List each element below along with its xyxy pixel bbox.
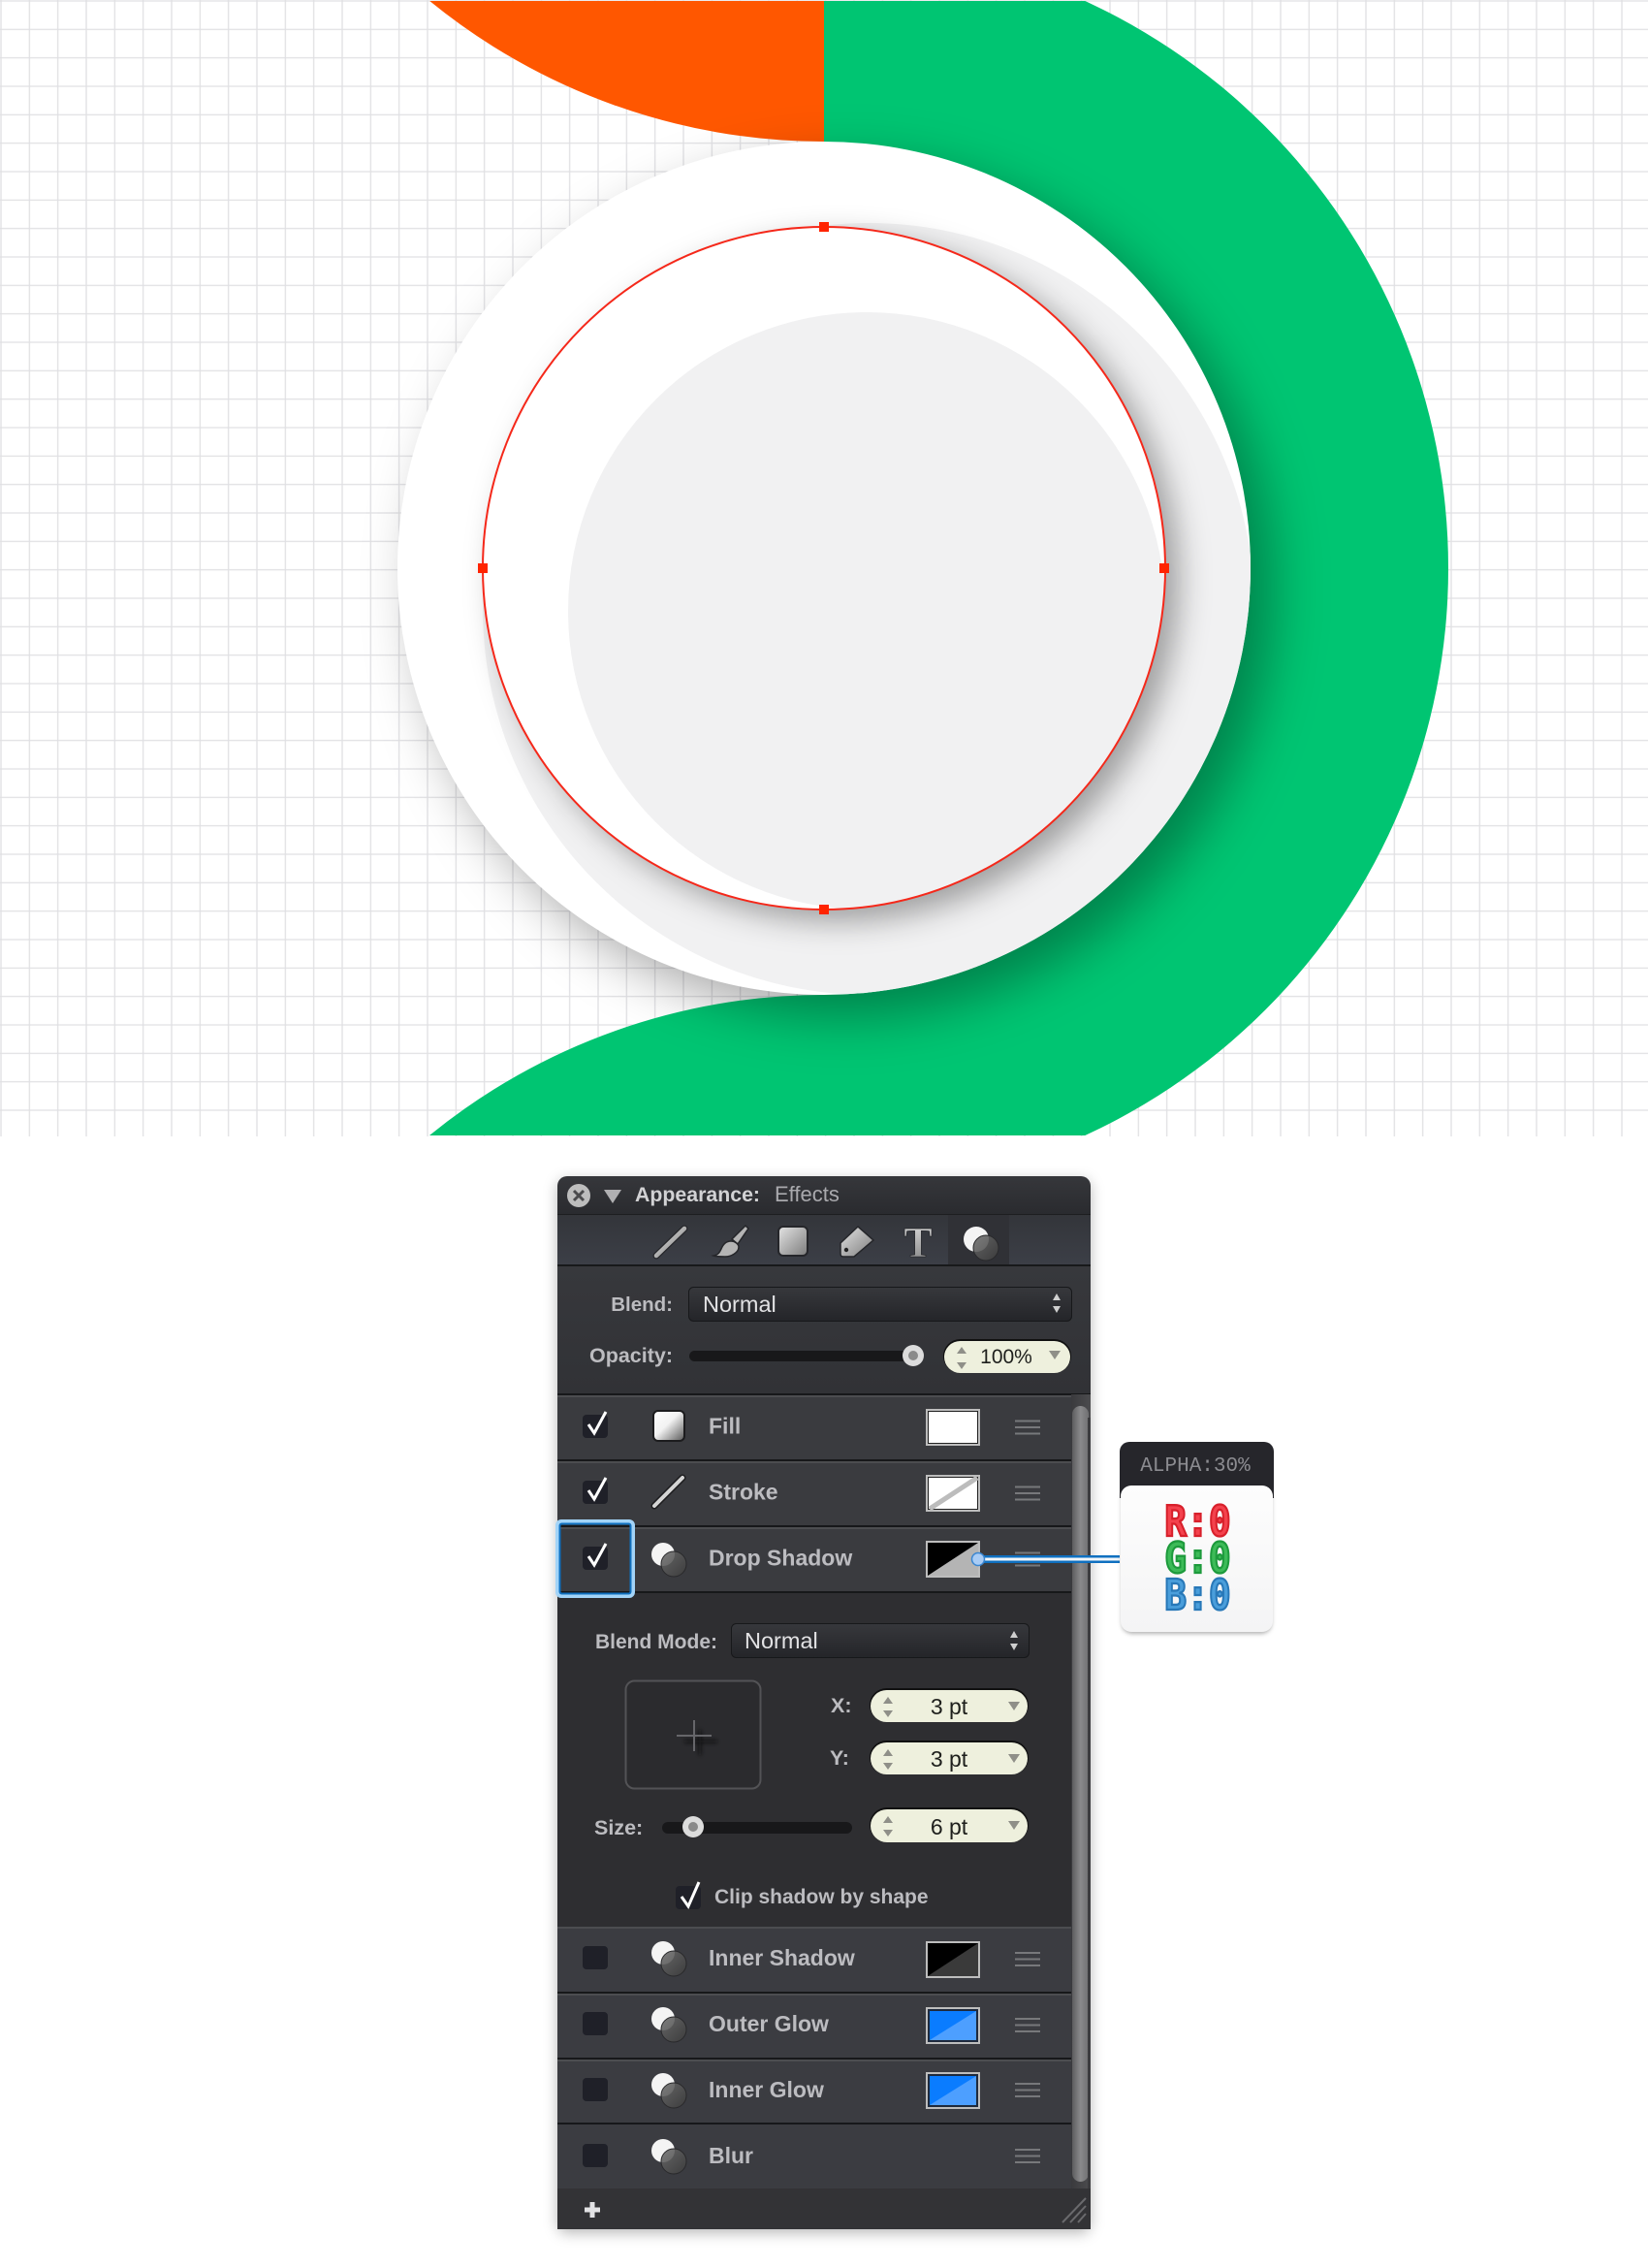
red value: R:0 bbox=[1164, 1496, 1231, 1547]
clip label: Clip shadow by shape bbox=[714, 1886, 929, 1908]
y field bbox=[870, 1741, 1029, 1774]
white circle shadow bbox=[419, 163, 1272, 1016]
icon: blur bbox=[651, 2139, 686, 2174]
grey middle circle bbox=[483, 223, 1254, 995]
checkbox empty bbox=[583, 2078, 608, 2101]
icon: shadow bbox=[651, 1543, 686, 1577]
opacity label: Opacity: bbox=[589, 1344, 673, 1367]
grey inner circle bbox=[568, 312, 1165, 910]
blend dropdown bbox=[688, 1288, 1072, 1321]
swatch: white bbox=[927, 1410, 979, 1445]
icon: resize grip bbox=[1062, 2198, 1086, 2222]
checkbox checked bbox=[583, 1412, 608, 1438]
icon: fill tool bbox=[778, 1227, 808, 1256]
x field: 3 pt bbox=[931, 1694, 968, 1719]
icon: close button bbox=[567, 1184, 590, 1207]
icon: glow bbox=[651, 2007, 686, 2042]
checkbox empty bbox=[583, 2144, 608, 2167]
panel shadow bbox=[557, 1180, 1091, 2233]
icon: text tool: T bbox=[903, 1219, 933, 1266]
size slider bbox=[662, 1816, 852, 1837]
icon: collapse triangle bbox=[604, 1190, 621, 1203]
panel subtitle: Effects bbox=[775, 1182, 840, 1206]
swatch: black and dark grey bbox=[927, 1942, 979, 1977]
drag handle bbox=[1015, 1421, 1040, 1433]
highlight: drop shadow checkbox bbox=[557, 1521, 633, 1596]
toolbar bbox=[557, 1214, 1091, 1266]
y label: Y: bbox=[830, 1746, 849, 1770]
checkbox empty bbox=[583, 1946, 608, 1969]
blend mode label: Blend Mode: bbox=[595, 1631, 717, 1653]
label: Outer Glow bbox=[709, 2011, 829, 2036]
label: Fill bbox=[709, 1414, 741, 1439]
icon: effects tool bbox=[964, 1227, 998, 1261]
red selection outline with handles bbox=[478, 222, 1169, 914]
opacity slider bbox=[689, 1345, 924, 1366]
blend dropdown: Normal bbox=[703, 1292, 776, 1317]
tooltip body bbox=[1121, 1485, 1273, 1634]
layer row: blur bbox=[557, 2123, 1071, 2188]
green value: G:0 bbox=[1164, 1533, 1231, 1583]
opacity field bbox=[943, 1339, 1071, 1373]
scrollbar bbox=[1071, 1394, 1091, 2188]
layer row: fill bbox=[557, 1393, 1091, 1460]
swatch: blue bbox=[927, 2073, 979, 2108]
drag handle bbox=[1015, 1953, 1040, 1965]
offset pad bbox=[626, 1681, 760, 1788]
icon: stroke tool bbox=[656, 1229, 684, 1256]
label: Inner Glow bbox=[709, 2077, 824, 2102]
green shape bbox=[429, 0, 1448, 1193]
title bar bbox=[557, 1176, 1091, 1214]
checkbox checked bbox=[583, 1544, 608, 1570]
artboard grid bbox=[0, 0, 1648, 1136]
layer row: outer glow bbox=[557, 1992, 1071, 2059]
opacity field: 100% bbox=[980, 1346, 1032, 1368]
size field bbox=[870, 1807, 1029, 1842]
layer row: inner glow bbox=[557, 2058, 1071, 2124]
size label: Size: bbox=[594, 1816, 643, 1839]
illustration: layered circles bbox=[397, 0, 1448, 1193]
label: Inner Shadow bbox=[709, 1945, 855, 1970]
swatch: black and grey bbox=[927, 1542, 979, 1577]
layer row: drop shadow bbox=[557, 1525, 1071, 1592]
layer row: stroke bbox=[557, 1459, 1071, 1526]
icon: shadow bbox=[651, 1941, 686, 1976]
blend mode dropdown bbox=[731, 1623, 1030, 1658]
bottom bar bbox=[557, 2188, 1091, 2229]
size field: 6 pt bbox=[931, 1814, 968, 1839]
tooltip header bbox=[1120, 1442, 1274, 1498]
drop shadow settings bbox=[557, 1591, 1071, 1927]
icon: stroke bbox=[654, 1478, 682, 1506]
blue value: B:0 bbox=[1164, 1570, 1231, 1620]
connector line bbox=[971, 1553, 1120, 1565]
drag handle bbox=[1015, 1487, 1040, 1499]
orange shape bbox=[428, 0, 824, 142]
white inner circle bbox=[483, 227, 1165, 910]
blend mode dropdown: Normal bbox=[745, 1628, 818, 1653]
white outer circle bbox=[397, 142, 1251, 995]
label: Blur bbox=[709, 2143, 753, 2168]
icon: brush tool bbox=[713, 1226, 748, 1257]
drag handle bbox=[1015, 1553, 1040, 1565]
icon: glow bbox=[651, 2073, 686, 2108]
panel title: Appearance: bbox=[635, 1183, 760, 1206]
blend settings bbox=[557, 1266, 1091, 1393]
icon: tag tool bbox=[840, 1227, 873, 1257]
colour tooltip bbox=[1120, 1442, 1274, 1634]
icon: fill bbox=[653, 1411, 684, 1441]
drag handle bbox=[1015, 2019, 1040, 2031]
appearance panel bbox=[557, 1176, 1091, 2229]
drag handle bbox=[1015, 2150, 1040, 2162]
clip checkbox bbox=[676, 1882, 701, 1909]
blend label: Blend: bbox=[611, 1294, 673, 1316]
swatch: blue bbox=[927, 2008, 979, 2043]
layer row: inner shadow bbox=[557, 1927, 1071, 1993]
icon: add bbox=[585, 2202, 600, 2218]
swatch: white with diagonal bbox=[927, 1476, 979, 1511]
y field: 3 pt bbox=[931, 1746, 968, 1772]
drag handle bbox=[1015, 2084, 1040, 2096]
x label: X: bbox=[831, 1694, 851, 1717]
label: Stroke bbox=[709, 1480, 778, 1505]
label: Drop Shadow bbox=[709, 1546, 852, 1571]
tooltip header: ALPHA:30% bbox=[1140, 1455, 1251, 1478]
checkbox empty bbox=[583, 2012, 608, 2035]
x field bbox=[870, 1688, 1029, 1722]
checkbox checked bbox=[583, 1478, 608, 1504]
